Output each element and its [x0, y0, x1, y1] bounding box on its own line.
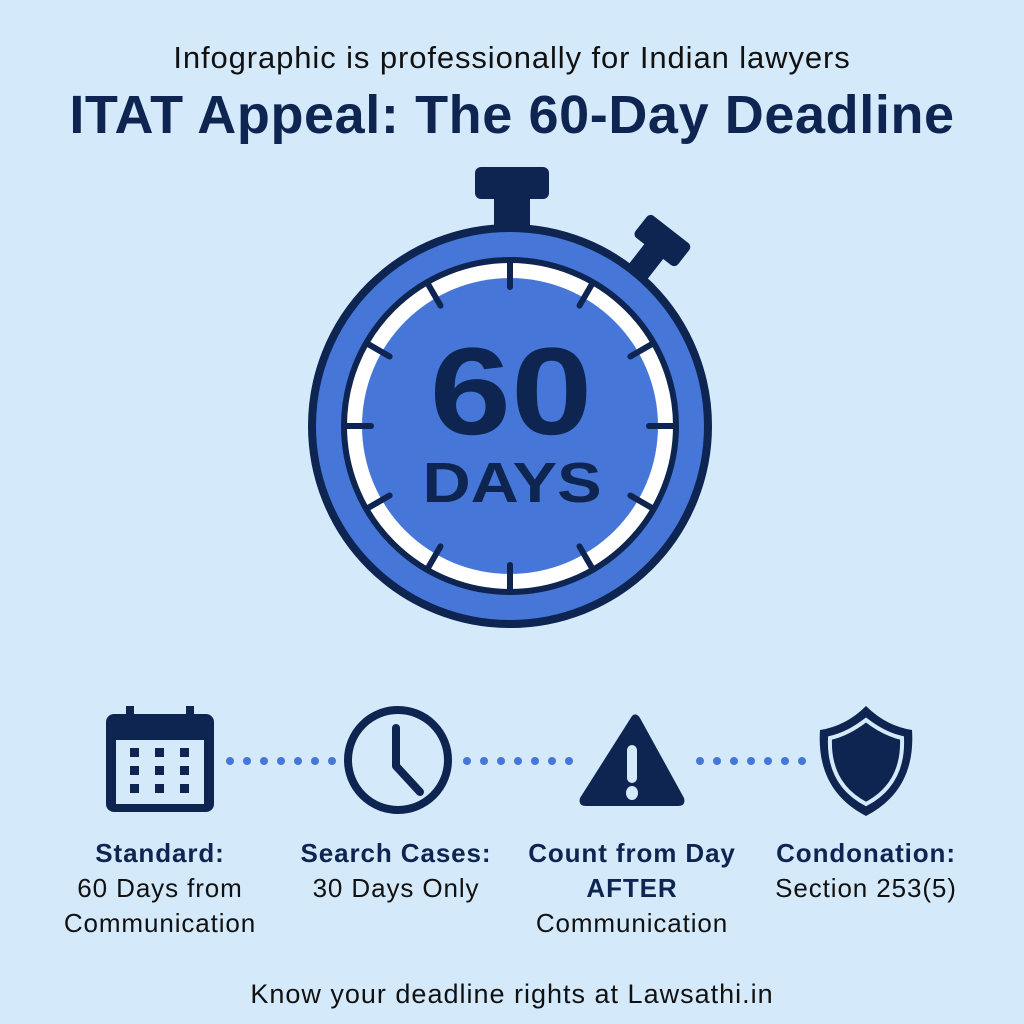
dots 1 — [226, 757, 336, 765]
label: search cases: Search Cases: — [301, 838, 491, 868]
footer: Know your deadline rights at Lawsathi.in — [250, 979, 774, 1009]
60 DAYS text — [422, 322, 602, 515]
label: condonation: Condonation: — [776, 838, 956, 868]
label: search cases — [301, 838, 491, 903]
label: standard: Standard: — [95, 838, 225, 868]
top button — [475, 167, 549, 231]
label: count: Count from Day — [528, 838, 736, 868]
label: standard: 60 Days from — [77, 873, 243, 903]
label: search cases: 30 Days Only — [313, 873, 479, 903]
60 DAYS text: DAYS — [422, 451, 602, 515]
icon: warning — [580, 714, 684, 806]
icon: shield — [820, 706, 912, 816]
label: count: AFTER — [586, 873, 678, 903]
title: ITAT Appeal: The 60-Day Deadline — [69, 85, 955, 145]
label: condonation — [775, 838, 957, 903]
label: standard — [64, 838, 256, 938]
60 DAYS text: 60 — [430, 322, 592, 461]
label: count: Communication — [536, 908, 728, 938]
dots 2 — [463, 757, 573, 765]
icon: calendar — [106, 706, 214, 812]
subtitle: Infographic is professionally for Indian lawyers — [173, 40, 851, 75]
label: count — [528, 838, 736, 938]
label: condonation: Section 253(5) — [775, 873, 957, 903]
icon row — [106, 706, 912, 816]
side button — [613, 213, 692, 293]
dots 3 — [696, 757, 806, 765]
icon: clock — [348, 710, 448, 810]
label: standard: Communication — [64, 908, 256, 938]
